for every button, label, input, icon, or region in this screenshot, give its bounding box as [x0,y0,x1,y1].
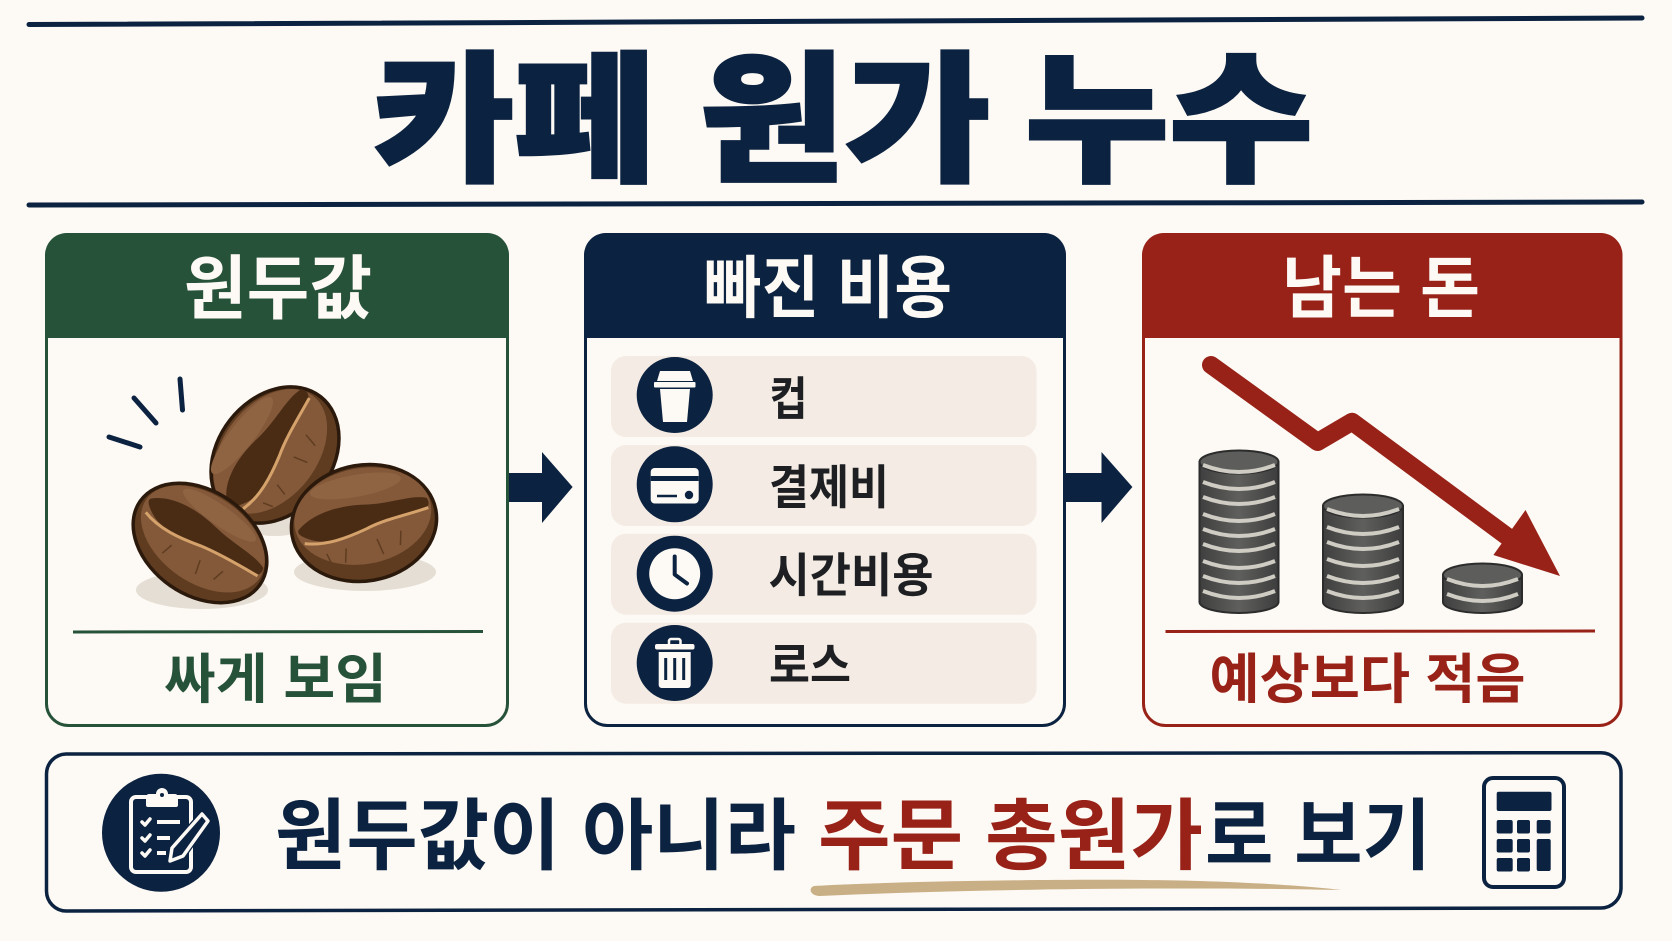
label: payment fee: 결제비 [769,461,889,514]
message text: 로 보기 [1205,792,1431,880]
panel header: green [45,233,509,338]
arrow: costs to remainder [1066,452,1132,523]
heading: missing costs: 빠진 비용 [704,251,952,327]
heading: money left: 남는 돈 [1282,251,1480,327]
row: cup [611,356,1036,437]
panel header: red [1142,233,1622,338]
icon: clock [649,548,700,599]
title: 원가 [700,42,990,200]
caption: looks cheap: 싸게 보임 [164,650,387,710]
callout banner [46,753,1621,911]
panel header: navy [584,233,1066,338]
icon: trash can [655,639,694,688]
message text [275,792,1431,880]
label: cup: 컵 [770,373,808,425]
icon: cup shape [654,371,696,422]
row: loss [611,623,1036,704]
icon: coffee beans [110,362,446,627]
icon: coin stacks [1200,450,1522,613]
panel: missing costs [584,233,1066,726]
title: 카페 [373,42,655,200]
message text: 주문 총원가 [818,792,1203,880]
heading: bean price: 원두값 [184,250,372,328]
coin stack: short [1443,564,1522,613]
caption: less than expected: 예상보다 적음 [1210,650,1526,710]
coin stack: tall [1200,450,1278,613]
divider [73,630,483,634]
icon: credit card [651,468,699,504]
arrow: falling trend [1211,365,1560,576]
label: loss: 로스 [769,639,851,692]
icon: calculator [1484,778,1564,887]
coin stack: medium [1323,494,1403,613]
arrow: bean to costs [509,452,573,523]
message text: 원두값이 아니라 [275,792,796,880]
title: 누수 [1025,42,1313,200]
divider [1166,630,1595,633]
panel: money left [1142,233,1622,726]
title with rules [29,18,1642,205]
label: time cost: 시간비용 [768,549,934,602]
icon: clipboard checklist [102,774,220,892]
row: payment fee [611,445,1036,526]
underline brush stroke [811,880,1341,896]
row: time cost [611,534,1036,615]
title [373,42,1313,200]
panel: coffee bean price [45,233,509,726]
icon: sparkle ticks [109,379,182,447]
